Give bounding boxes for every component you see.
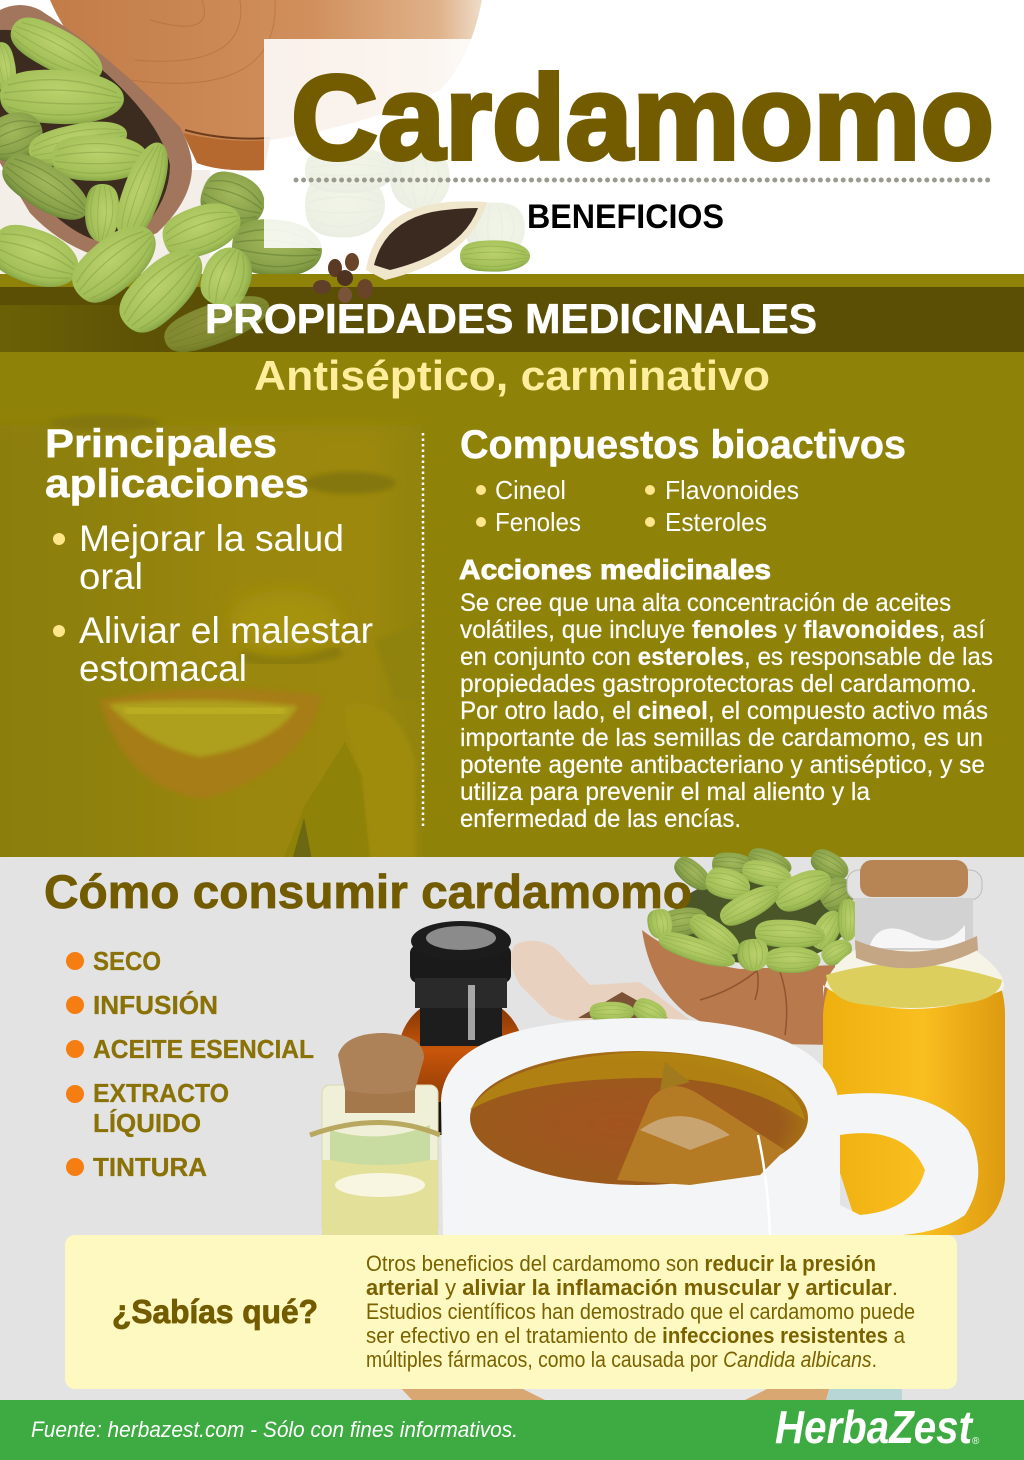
photo: oil bottle with cork [823, 860, 1005, 1235]
title: Cardamomo [291, 51, 994, 185]
logo: HerbaZest: ® [972, 1436, 980, 1447]
list: ways to consume: SECO [93, 946, 161, 976]
callout heading: ¿Sabías qué? [112, 1293, 318, 1330]
heading: how to consume: Cómo consumir cardamomo [44, 865, 692, 918]
list of applications [53, 518, 373, 689]
column divider [422, 433, 424, 826]
list of applications: Aliviar el malestar [79, 610, 373, 651]
paragraph: medicinal actions: importante de las semillas de cardamomo, es un [460, 724, 983, 752]
subheading: antiseptic, carminative: Antiséptico, carminativo [254, 352, 770, 399]
logo: HerbaZest: HerbaZest [775, 1401, 973, 1453]
list of applications: oral [79, 556, 143, 597]
list of applications: Mejorar la salud [79, 518, 344, 559]
translucent title panel [264, 39, 479, 248]
heading: bioactive compounds: Compuestos bioactivos [460, 423, 906, 467]
photo: amber essential oil bottle [399, 921, 523, 1135]
dotted title divider [296, 178, 992, 182]
photo: wooden mortar and cardamom pods [0, 0, 482, 298]
paragraph: medicinal actions: en conjunto con esteroles, es responsable de las [460, 643, 993, 671]
list: ways to consume: TINTURA [93, 1152, 207, 1182]
source note: Fuente: herbazest.com - Sólo con fines informativos. [31, 1417, 518, 1442]
list: ways to consume: INFUSIÓN [93, 990, 218, 1020]
band: medicinal properties background [0, 274, 1024, 857]
panel: bioactive compounds [459, 423, 993, 833]
pods overlapping the band [0, 212, 530, 361]
callout text: Otros beneficios del cardamomo son reducir la presión [366, 1251, 876, 1276]
callout text: arterial y aliviar la inflamación muscular y articular. [366, 1275, 898, 1300]
pale pods behind title [305, 147, 525, 258]
paragraph: medicinal actions: utiliza para prevenir el mal aliento y la [460, 778, 870, 806]
list of compounds [476, 475, 799, 537]
paragraph: medicinal actions: volátiles, que incluye fenoles y flavonoides, así [460, 616, 985, 644]
heading: medicinal actions: Acciones medicinales [459, 554, 771, 585]
list of compounds: Cineol [495, 475, 566, 505]
illustration: mouth smile background [52, 416, 422, 857]
list: ways to consume: EXTRACTO [93, 1078, 229, 1108]
list: ways to consume: LÍQUIDO [93, 1108, 201, 1138]
list: ways to consume [66, 946, 314, 1182]
paragraph: medicinal actions: Se cree que una alta concentración de aceites [460, 589, 951, 617]
paragraph: medicinal actions: potente agente antibacteriano y antiséptico, y se [460, 751, 985, 779]
heading: main applications [45, 422, 309, 506]
paragraph: medicinal actions [460, 589, 993, 833]
list: ways to consume: ACEITE ESENCIAL [93, 1034, 314, 1064]
paragraph: medicinal actions: Por otro lado, el cineol, el compuesto activo más [460, 697, 988, 725]
photo: saucer under callout [398, 1385, 902, 1400]
callout text: múltiples fármacos, como la causada por Candida albicans. [366, 1347, 877, 1372]
heading: main applications: aplicaciones [45, 462, 309, 506]
paragraph: medicinal actions: propiedades gastroprotectoras del cardamomo. [460, 670, 977, 698]
paragraph: medicinal actions: enfermedad de las encías. [460, 805, 741, 833]
subtitle: BENEFICIOS [527, 198, 724, 236]
photo: wooden scoop [511, 941, 690, 1030]
photo: bowl of cardamom pods [642, 844, 860, 1045]
panel: main applications [45, 422, 373, 689]
heading: main applications: Principales [45, 422, 277, 466]
footer [0, 1400, 1024, 1460]
callout text: Estudios científicos han demostrado que el cardamomo puede [366, 1299, 915, 1324]
photo: small oil bottle with cork [310, 1033, 440, 1235]
list of compounds: Fenoles [495, 507, 581, 537]
list of applications: estomacal [79, 648, 247, 689]
photo: white cup with tea [441, 1018, 978, 1236]
callout text: ser efectivo en el tratamiento de infecciones resistentes a [366, 1323, 906, 1348]
list of compounds: Esteroles [665, 507, 767, 537]
panel: how to consume background [0, 857, 1024, 1400]
dark title bar [0, 287, 1024, 352]
callout text [366, 1251, 915, 1372]
callout: did you know [65, 1235, 957, 1389]
icon: open pod and seeds [313, 201, 487, 303]
heading: medicinal properties: PROPIEDADES MEDICINALES [205, 295, 817, 342]
list of compounds: Flavonoides [665, 475, 799, 505]
